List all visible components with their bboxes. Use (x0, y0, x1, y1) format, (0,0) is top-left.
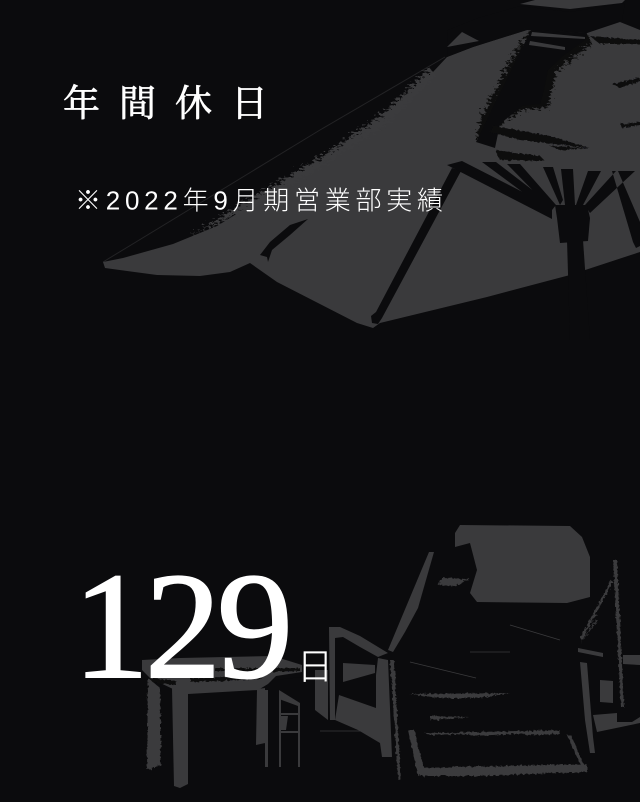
right panel shadow feather (476, 32, 592, 142)
canopy feathered edge (190, 68, 436, 236)
big number with unit (73, 542, 333, 710)
canopy (103, 22, 640, 328)
chair back frame (388, 552, 434, 652)
table apron speckle (150, 668, 300, 685)
canopy top strip (520, 0, 625, 9)
right side deck (593, 655, 640, 732)
table top and apron (142, 656, 302, 694)
note: ※2022年9月期営業部実績 (75, 186, 448, 216)
chair headrest bar (438, 578, 470, 586)
chair arm lower panel (335, 658, 392, 757)
table leg left (147, 678, 161, 770)
chair cushion (455, 525, 590, 603)
canopy top flap (447, 3, 625, 57)
chair thin lines (320, 625, 560, 731)
right panel speckle (490, 36, 640, 161)
chair lower left rail (408, 730, 424, 776)
parasol hub (555, 205, 590, 243)
faint canopy edge line (103, 57, 445, 262)
number 129: 129 (73, 542, 289, 710)
chair arm curve and post (329, 627, 388, 720)
chair front leg left speckle (390, 660, 401, 780)
title: 年間休日 (63, 83, 287, 125)
illustration: parasol (103, 0, 640, 340)
canopy flap highlight (447, 32, 479, 47)
table right shadow (262, 677, 302, 690)
chair side block (315, 670, 328, 720)
right panel light bars (529, 32, 585, 50)
chair lower rails (409, 693, 560, 736)
right panel shadow core (476, 30, 587, 148)
chair arm band (343, 663, 375, 682)
small chair back (279, 690, 300, 767)
chair right frame (580, 662, 595, 753)
chair bottom rail (418, 764, 587, 776)
frame spokes (447, 161, 640, 248)
chair right speckle (567, 560, 624, 768)
unit: 日 (297, 646, 333, 687)
table leg front (172, 688, 188, 788)
small chair rails (279, 699, 298, 767)
strut: long (371, 168, 461, 324)
strut: left short (260, 219, 308, 262)
illustration: deck chair (315, 525, 640, 780)
chair right top bar (578, 648, 603, 657)
table leg right (256, 688, 268, 767)
parasol pole (567, 240, 590, 340)
illustration: table (142, 656, 302, 788)
